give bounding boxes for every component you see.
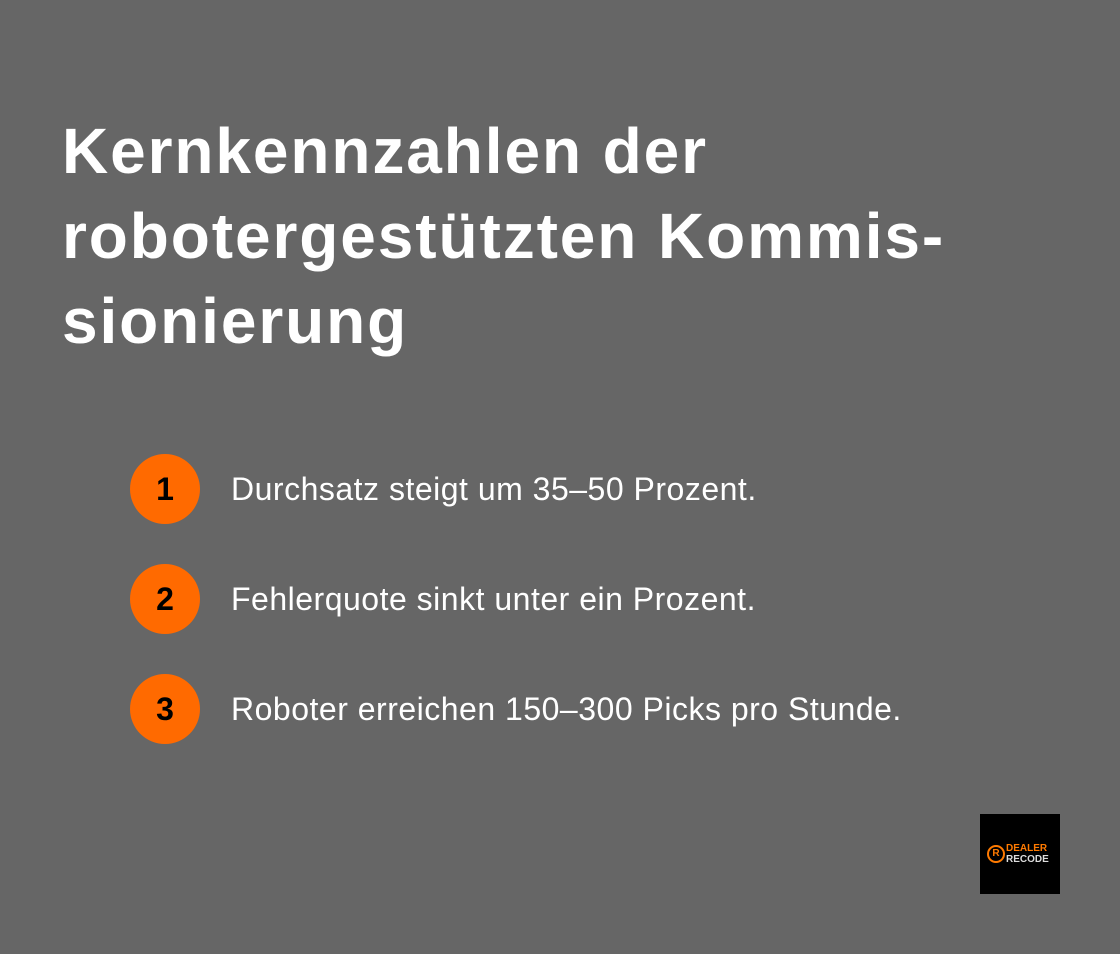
item 2 (130, 564, 756, 634)
badge 3: 3 (156, 691, 174, 727)
badge 1: 1 (156, 471, 174, 507)
title: Kernkennzahlen der (62, 115, 708, 187)
title (62, 115, 945, 357)
logo (980, 814, 1060, 894)
badge 3 (130, 674, 200, 744)
title: sionierung (62, 285, 408, 357)
logo icon (987, 845, 1005, 863)
item 1 (130, 454, 757, 524)
logo text: RECODE (1006, 854, 1049, 865)
text 2: Fehlerquote sinkt unter ein Prozent. (231, 581, 756, 617)
logo text: DEALER (1006, 843, 1047, 854)
item 3 (130, 674, 902, 744)
badge 2 (130, 564, 200, 634)
text 1: Durchsatz steigt um 35–50 Prozent. (231, 471, 757, 507)
logo text (1006, 843, 1049, 865)
logo icon: R (992, 848, 1000, 859)
text 3: Roboter erreichen 150–300 Picks pro Stunde. (231, 691, 902, 727)
badge 1 (130, 454, 200, 524)
badge 2: 2 (156, 581, 174, 617)
title: robotergestützten Kommis- (62, 200, 945, 272)
